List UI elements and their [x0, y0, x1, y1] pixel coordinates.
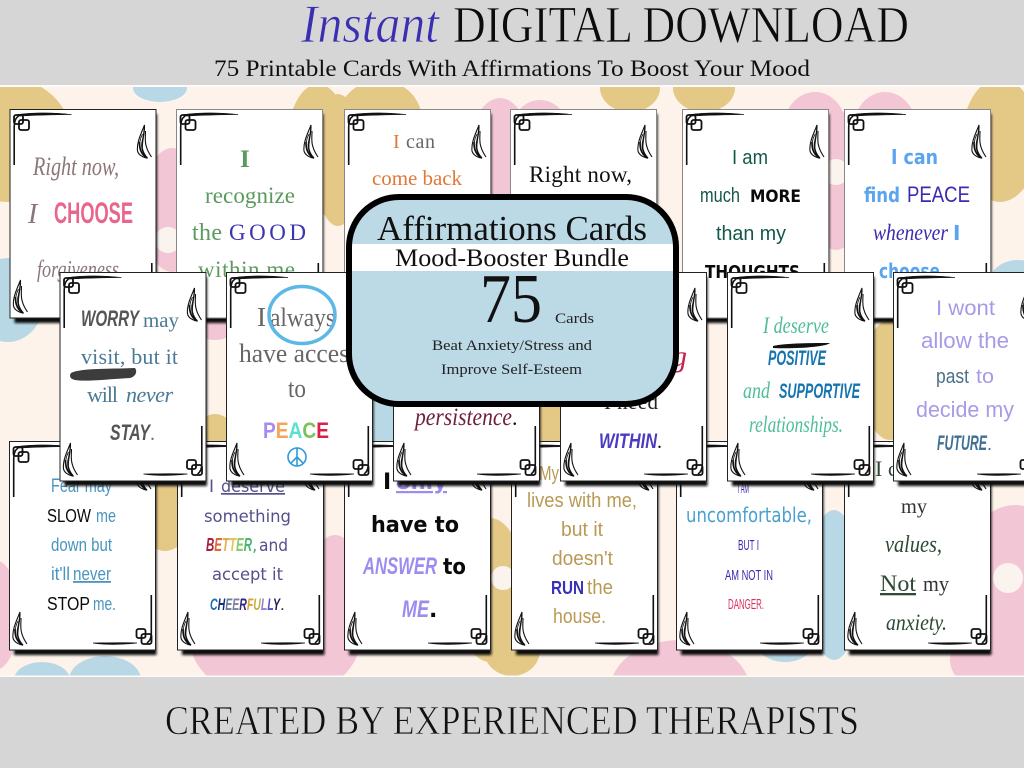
- card: fear may slow me down: STOP: [47, 594, 90, 614]
- card: I only have to answer to me: have to: [371, 513, 459, 538]
- card: worry may visit: may: [143, 308, 179, 332]
- card: my anxiety lives with me: [512, 442, 658, 655]
- card: persistence: persistence: [413, 404, 512, 431]
- card: fear may slow me down: [10, 442, 156, 655]
- card: I am much more than my thoughts: I am: [732, 147, 768, 169]
- card: right now I choose forgiveness: CHOOSE: [54, 197, 133, 230]
- card: I choose my values not my anxiety: I c: [875, 456, 898, 481]
- card: I can find peace whenever I choose: I can: [891, 145, 938, 169]
- card: fear may slow me down: SLOW: [47, 506, 91, 526]
- card: I recognize the good within me: recognize: [205, 183, 295, 208]
- card: fear may slow me down: me.: [93, 594, 116, 614]
- card: right now: [510, 110, 658, 323]
- card: worry may visit: never: [126, 382, 173, 407]
- card: I can find peace whenever I choose: find: [864, 183, 900, 207]
- card: my anxiety lives with me: but it: [561, 519, 603, 541]
- top header band: [0, 0, 1024, 85]
- bottom white strip: [0, 676, 1024, 677]
- card: I always have access to peace: have access: [239, 339, 359, 368]
- card: I am much more than my thoughts: THOUGHTS: [705, 262, 800, 283]
- card: I only have to answer to me: only: [396, 470, 447, 495]
- card: I won't allow the past: to: [976, 366, 994, 388]
- card: worry may visit: [60, 272, 207, 486]
- footer text: CREATED BY EXPERIENCED THERAPISTS: [165, 697, 859, 743]
- card: I deserve something better: [178, 442, 324, 655]
- card: I choose my values not my anxiety: Not: [880, 571, 917, 596]
- top white strip: [0, 85, 1024, 87]
- card: I choose my values not my anxiety: my: [901, 496, 927, 518]
- card: I deserve something better: and: [259, 536, 288, 556]
- card: I can find peace whenever I choose: I: [953, 221, 960, 245]
- card: right now I choose forgiveness: forgiveness: [37, 257, 119, 283]
- card: I can come back: come back: [372, 166, 462, 190]
- card: my anxiety lives with me: house.: [553, 606, 606, 628]
- card: I always have access to peace: I: [257, 302, 266, 332]
- card: I need within: .: [657, 431, 662, 453]
- card: I deserve something better: deserve: [221, 477, 285, 497]
- card: I only have to answer to me: [344, 442, 492, 655]
- card: worry may visit: WORRY: [81, 306, 141, 331]
- cards label: Cards: [555, 311, 594, 327]
- card: I always have access to peace: always: [270, 303, 335, 332]
- card: fear may slow me down: Fear may: [51, 476, 112, 497]
- card: my anxiety lives with me: lives with me,: [527, 490, 637, 512]
- card: I can come back: I: [393, 131, 400, 153]
- subtitle: 75 Printable Cards With Affirmations To Boost Your Mood: [214, 56, 811, 81]
- card: I can come back: can: [406, 131, 435, 153]
- card: I need within: g: [672, 340, 687, 373]
- card: worry may visit: STAY: [110, 420, 152, 445]
- card: I recognize the good within me: I: [240, 146, 250, 173]
- panel heading: Affirmations Cards: [377, 209, 647, 248]
- card: I am much more than my thoughts: [682, 110, 830, 323]
- card: I recognize the good within me: within me: [198, 257, 295, 282]
- card: I deserve something better: BETTER: [206, 535, 252, 555]
- card: I choose my values not my anxiety: anxiety.: [886, 610, 947, 635]
- card: I am uncomfortable but not in danger: [676, 442, 824, 655]
- card: fear may slow me down: never: [73, 564, 111, 584]
- card: my anxiety lives with me: doesn't: [552, 548, 613, 570]
- card: I choose my values not my anxiety: [844, 442, 992, 655]
- card: I won't allow the past: past: [936, 366, 969, 388]
- card: I can find peace whenever I choose: choose: [879, 259, 940, 283]
- panel line 2: Improve Self-Esteem: [441, 362, 583, 378]
- card: my anxiety lives with me: My: [539, 463, 559, 485]
- card: I deserve positive relationships: POSITIVE: [768, 347, 827, 370]
- card: I always have access to peace: to: [288, 374, 306, 403]
- card: worry may visit: .: [150, 423, 155, 445]
- card: I always have access to peace: [226, 272, 374, 486]
- card: I only have to answer to me: I: [383, 470, 391, 495]
- card: I deserve something better: accept it: [212, 565, 283, 585]
- card: I deserve positive relationships: and: [743, 378, 770, 403]
- card: I deserve positive relationships: relationships.: [749, 412, 843, 437]
- card: I choose my values not my anxiety: my: [923, 571, 949, 596]
- card: I recognize the good within me: GOOD: [229, 220, 306, 245]
- card: persistence: [394, 272, 540, 486]
- card: I am uncomfortable but not in danger: I AM: [738, 480, 749, 496]
- card: I can find peace whenever I choose: whenever: [873, 220, 949, 245]
- panel line 1: Beat Anxiety/Stress and: [432, 338, 593, 354]
- card: my anxiety lives with me: the: [587, 577, 613, 599]
- card: I am much more than my thoughts: MORE: [750, 187, 801, 207]
- card: I won't allow the past: [894, 272, 1024, 486]
- card: I am uncomfortable but not in danger: DANGER.: [728, 596, 764, 613]
- card: I only have to answer to me: .: [429, 598, 437, 623]
- card: right now I choose forgiveness: Right now,: [32, 152, 119, 181]
- card: I can find peace whenever I choose: PEACE: [907, 182, 970, 207]
- card: I won't allow the past: allow the: [921, 328, 1009, 353]
- card: I won't allow the past: decide my: [916, 397, 1014, 422]
- card: I only have to answer to me: to: [443, 555, 466, 580]
- card: I am uncomfortable but not in danger: BUT I: [738, 537, 759, 554]
- card: worry may visit: will: [87, 382, 118, 407]
- card: I deserve positive relationships: SUPPORTIVE: [779, 380, 861, 403]
- card: right now: Right now,: [529, 162, 632, 187]
- card: I recognize the good within me: the: [192, 220, 222, 246]
- card: I need within: I need: [604, 390, 658, 414]
- card: I deserve something better: something: [204, 507, 291, 527]
- card: I deserve positive relationships: [728, 272, 874, 486]
- center title panel: [349, 197, 676, 404]
- card: I recognize the good within me: [176, 110, 324, 323]
- card: I can find peace whenever I choose: [844, 110, 992, 323]
- card: fear may slow me down: down but: [51, 535, 112, 555]
- card: I deserve something better: .: [280, 595, 285, 614]
- bottom footer band: [0, 677, 1024, 768]
- big number 75: 75: [480, 261, 542, 338]
- card: I won't allow the past: .: [987, 434, 992, 454]
- card: I need within: WITHIN: [599, 430, 658, 453]
- card: I won't allow the past: FUTURE: [937, 432, 988, 455]
- card: persistence: .: [512, 405, 518, 430]
- card: I am much more than my thoughts: than my: [716, 223, 786, 245]
- card: I won't allow the past: I wont: [936, 297, 995, 320]
- panel subheading: Mood-Booster Bundle: [395, 245, 629, 272]
- card: I only have to answer to me: ME: [402, 596, 430, 623]
- card: I am uncomfortable but not in danger: uncomfortable,: [686, 503, 812, 527]
- card: fear may slow me down: it'll: [51, 564, 70, 584]
- card: I always have access to peace: PEACE: [263, 418, 329, 443]
- card: right now I choose forgiveness: I: [27, 199, 39, 230]
- card: right now I choose forgiveness: [10, 110, 157, 323]
- card: I am uncomfortable but not in danger: AM NOT IN: [725, 567, 773, 584]
- card: I need within: [560, 272, 708, 486]
- card: I choose my values not my anxiety: values,: [885, 532, 942, 558]
- card: worry may visit: visit, but it: [81, 344, 178, 369]
- card: I am much more than my thoughts: much: [700, 185, 740, 207]
- card: I can come back: [344, 110, 492, 323]
- card: I deserve something better: I: [209, 477, 214, 497]
- card: I deserve something better: ,: [252, 536, 257, 556]
- card: I deserve something better: CHEERFULLY: [210, 595, 281, 614]
- card: my anxiety lives with me: RUN: [551, 578, 584, 598]
- card: fear may slow me down: me: [96, 506, 116, 526]
- card: I deserve positive relationships: I deserve: [762, 313, 829, 338]
- card: I only have to answer to me: ANSWER: [362, 553, 437, 580]
